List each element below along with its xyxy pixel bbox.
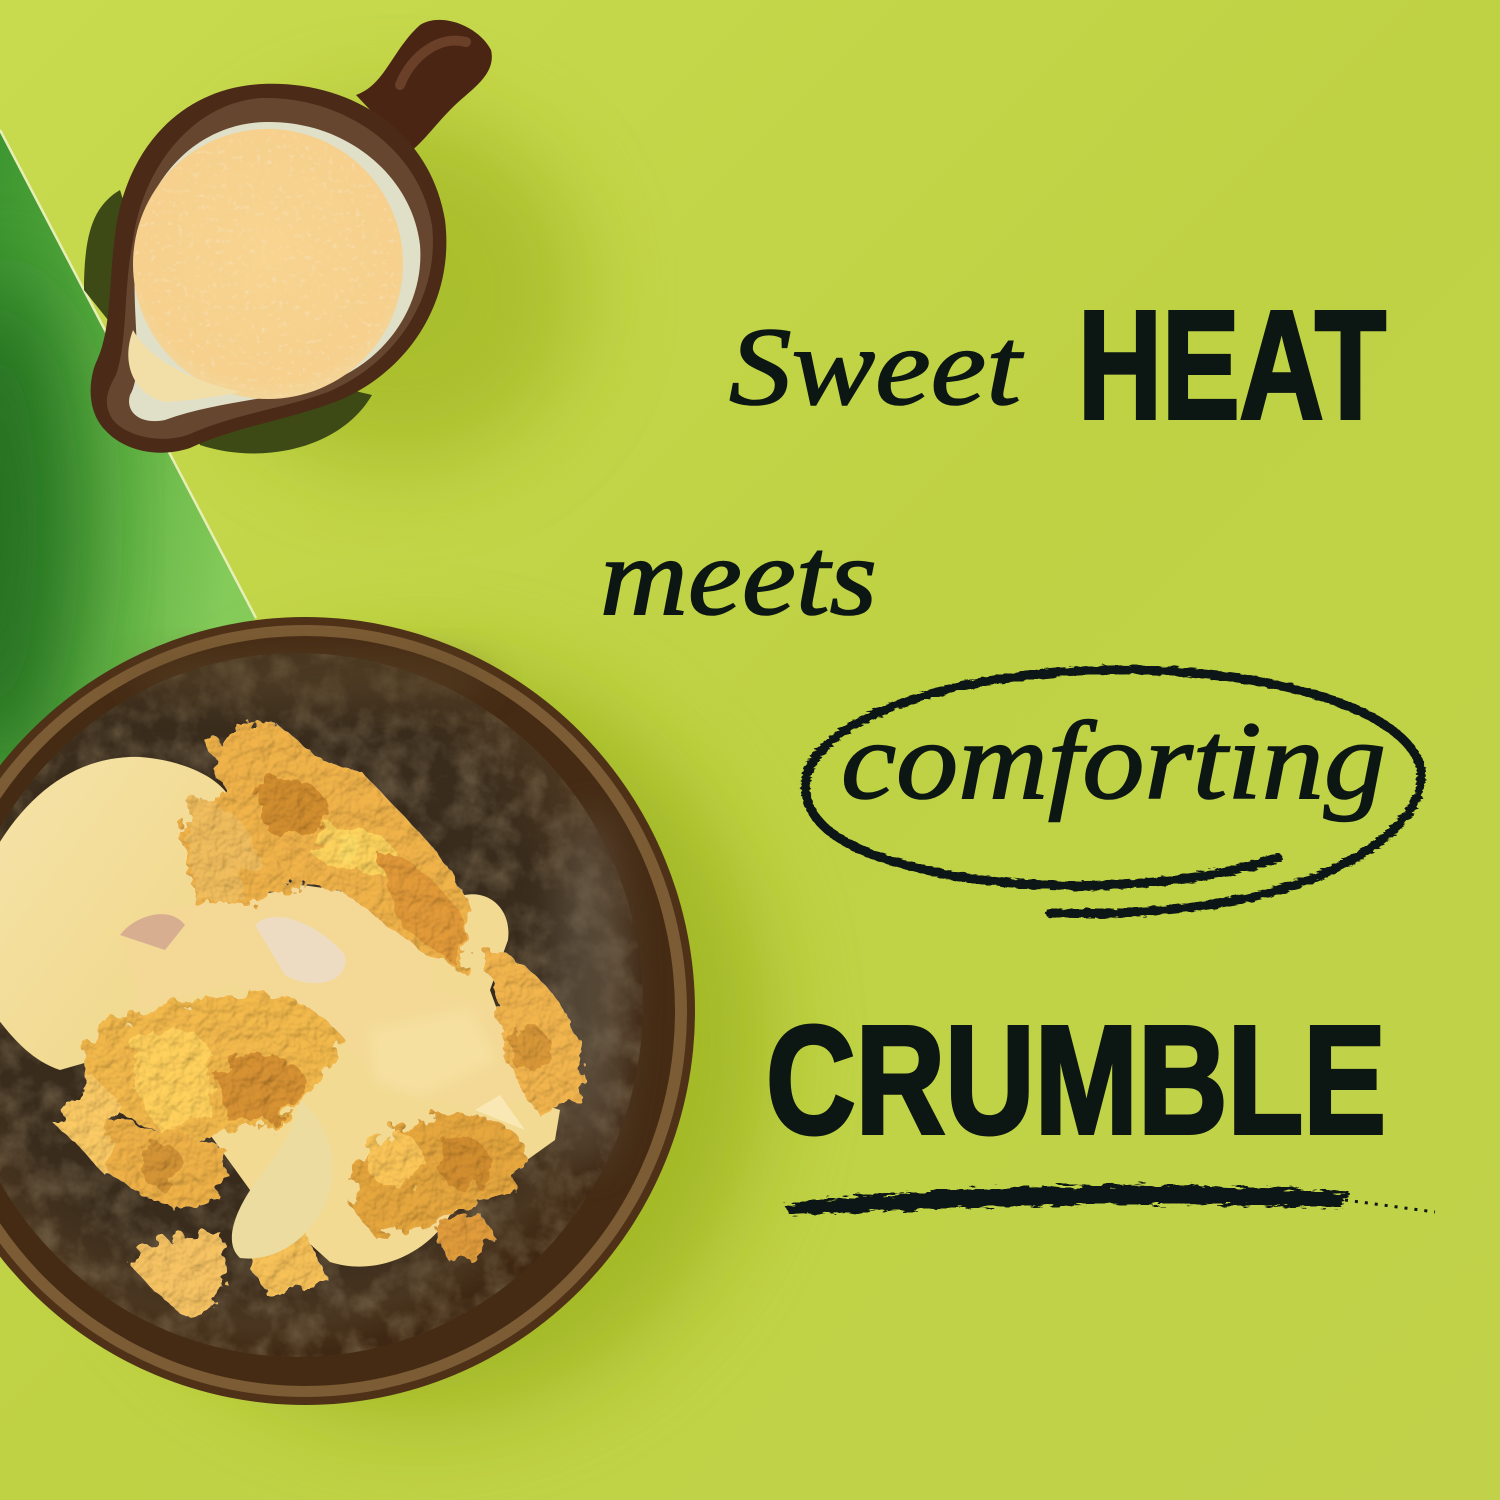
heading: Sweet HEAT: Sweet [729,306,1025,429]
jug inner wall [129,122,420,421]
custard pool left [0,757,228,1070]
sauce glaze centre [120,885,525,1110]
text: meets: meets [600,516,877,639]
icon: hand-drawn circle around comforting [806,670,1421,914]
jug handle [356,20,492,152]
custard under crumble [120,894,560,1267]
panel: green card [0,130,256,800]
heading: Sweet HEAT [729,279,1386,451]
plate well [0,653,643,1357]
icon: custard jug [84,20,492,453]
icon: plate of crumble [0,617,695,1405]
icon: brush underline [783,1185,1435,1215]
plate outer [0,617,695,1405]
heading: Sweet HEAT: HEAT [1078,279,1386,451]
crumble topping [55,722,584,1320]
text: comforting: comforting [841,700,1386,823]
jug rim [91,84,446,453]
shadows under tableware [70,110,770,1420]
jug body shadow side [84,190,372,453]
apple slice [232,1100,333,1259]
custard surface [133,129,403,399]
